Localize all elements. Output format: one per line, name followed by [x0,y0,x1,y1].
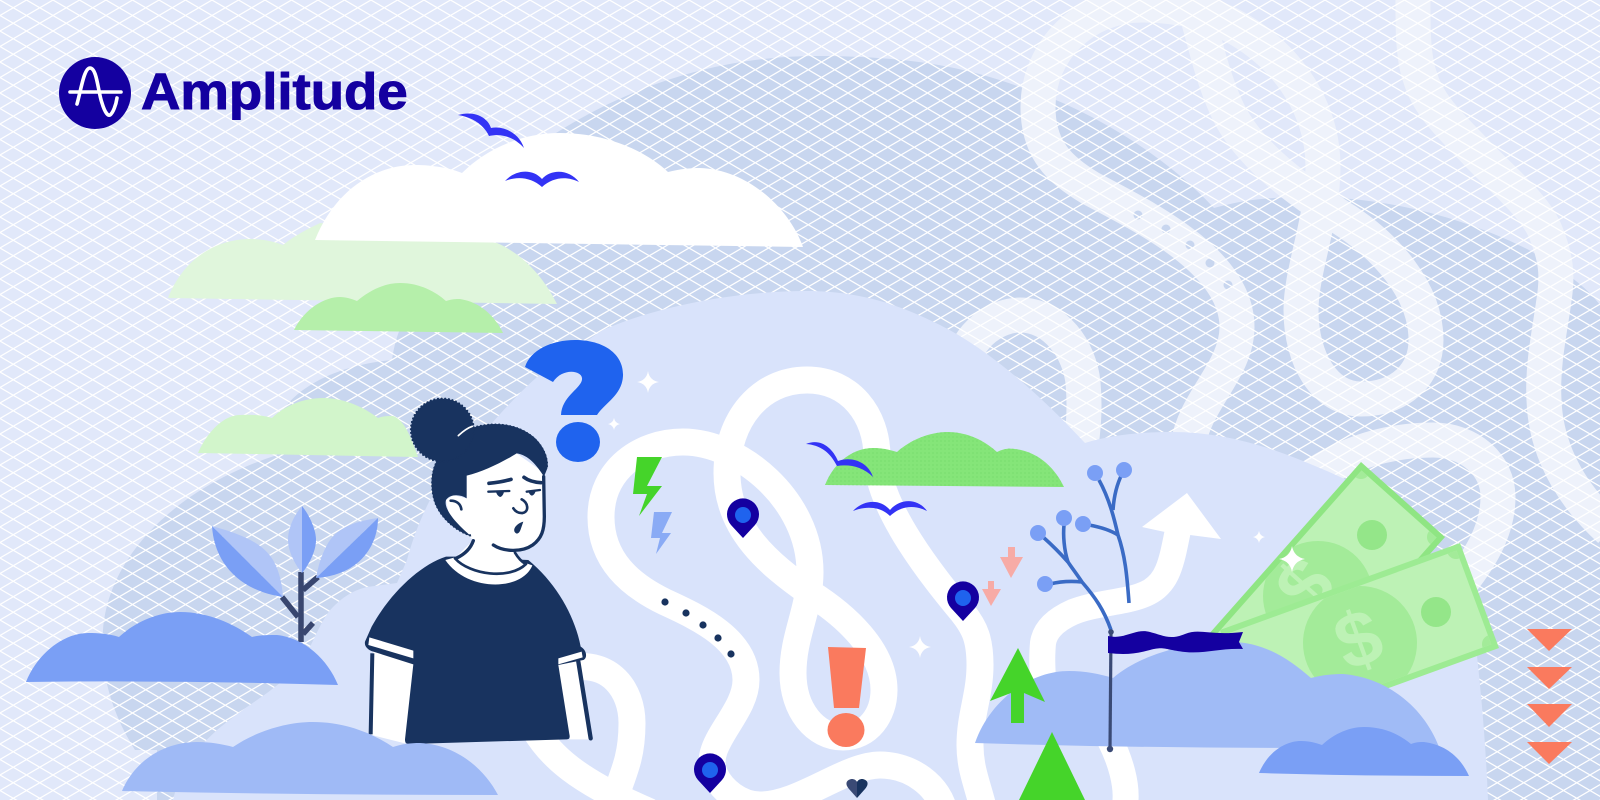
bird [458,113,524,148]
dotted trail [661,598,735,658]
sparkle on bill [1279,546,1305,572]
right leaf [316,518,378,578]
blue hill left [26,612,338,685]
plant stem [282,572,318,642]
front bill: $ [1323,590,1394,688]
money bills [1210,462,1499,688]
pale foreground hill [173,291,1488,800]
plant left [212,506,378,642]
bird [505,172,579,187]
green arrow lower [1019,732,1085,800]
faded background roads [960,0,1600,590]
triangles right [1527,629,1572,764]
flag pole [1107,629,1114,752]
flag [1107,629,1243,752]
back bill [1210,462,1445,633]
plant stems [1043,474,1129,630]
map pin [694,753,726,793]
birds centre [806,442,927,516]
sleeve cuff right [558,652,583,664]
logo wordmark: Amplitude [141,64,408,121]
map pin [947,581,979,621]
collar [445,557,532,584]
bird [853,501,927,516]
berries [1030,462,1132,592]
character: worried person [365,399,591,744]
blue hill right small [1259,727,1469,776]
green cloud centre [825,432,1064,487]
back bill: $ [1258,540,1352,631]
lower light green cloud [198,398,418,457]
road arrow [1042,493,1221,680]
left leaf [212,526,283,597]
white cloud [315,133,803,247]
road: lower right [1110,740,1126,800]
hair bun [411,399,474,461]
eyes [496,491,536,497]
arms [371,650,591,743]
exclamation mark [828,647,866,747]
green arrow upper [990,648,1045,723]
flag banner [1108,631,1243,654]
road: main winding path [601,380,985,800]
blue hill bottom [122,722,498,795]
question mark [525,340,623,462]
face lines [451,426,544,574]
lightning bolt green [633,457,662,516]
sparkles [608,371,1265,658]
light green cloud top [168,223,557,304]
faded dots on background road [1134,210,1232,290]
mid green cloud [294,283,503,333]
middle leaf [288,506,316,573]
bird [806,442,873,477]
neck and face [446,453,545,572]
lightning bolt blue [651,512,672,554]
road: lower left [535,667,650,800]
mouth [514,522,523,534]
birds top [458,113,579,187]
blue plant with berries [1030,462,1132,630]
sleeve cuff left [368,637,413,658]
front bill [1220,543,1499,688]
shirt [365,557,586,744]
logo mark [59,57,131,129]
map pin [727,498,759,538]
hair bumps [432,425,547,535]
pink down arrows [982,547,1023,606]
heart [846,779,868,798]
logo [59,57,408,129]
blue hill right big [975,642,1439,748]
hair [432,424,548,537]
